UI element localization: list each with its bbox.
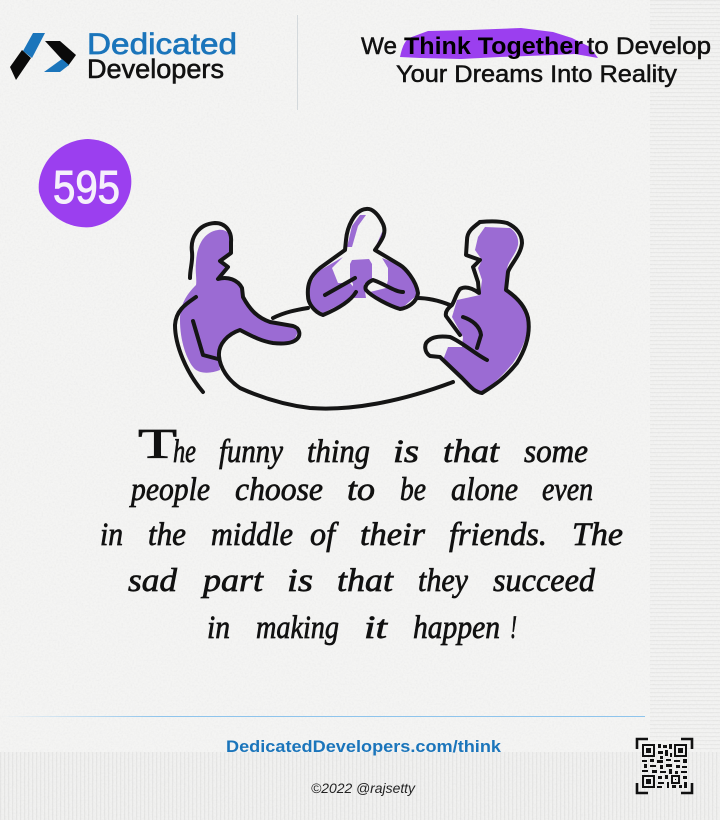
quote line 4: part — [201, 563, 264, 599]
quote line 4: succeed — [493, 563, 595, 599]
quote line 5: ! — [510, 610, 517, 646]
tagline line 1: to Develop — [587, 33, 711, 60]
purple brush highlight — [400, 28, 598, 59]
quote line 4: they — [418, 563, 468, 599]
quote line 4: is — [287, 563, 313, 599]
copyright: ©2022 @rajsetty — [311, 780, 416, 796]
quote line 3: friends. — [449, 517, 547, 553]
quote line 5: it — [364, 610, 388, 646]
logo wordmark: Developers — [87, 54, 224, 84]
badge: 595 — [39, 139, 131, 227]
quote line 3 — [100, 517, 623, 553]
quote line 3: of — [310, 517, 339, 553]
footer url: DedicatedDevelopers.com/think — [226, 737, 502, 756]
quote line 5: in — [207, 610, 230, 646]
tagline line 1 — [361, 33, 711, 60]
logo: Dedicated Developers — [10, 28, 237, 84]
illustration: three people around a table — [175, 209, 529, 409]
quote line 4: sad — [128, 563, 178, 599]
quote line 2 — [129, 472, 593, 508]
qr code — [637, 739, 692, 793]
tagline line 1: We — [361, 33, 397, 60]
quote line 1: thing — [307, 434, 370, 470]
person right — [425, 221, 529, 393]
qr corner brackets — [637, 739, 692, 793]
logo mark — [10, 33, 76, 80]
quote line 2: choose — [235, 472, 323, 508]
quote line 5: happen — [413, 610, 500, 646]
quote line 1: is — [393, 434, 419, 470]
quote line 3: The — [572, 517, 623, 553]
quote line 1: funny — [219, 434, 283, 470]
person middle — [308, 209, 418, 315]
quote line 1: T — [138, 422, 177, 468]
logo wordmark — [87, 28, 237, 84]
quote line 2: be — [400, 472, 426, 508]
quote line 1 — [138, 422, 588, 470]
quote line 4 — [128, 563, 595, 599]
quote line 1: that — [443, 434, 500, 470]
person left — [175, 223, 453, 409]
tagline line 2: Your Dreams Into Reality — [396, 61, 677, 88]
quote line 4: that — [337, 563, 394, 599]
quote line 3: in — [100, 517, 123, 553]
qr modules — [642, 744, 687, 788]
badge: 595: 595 — [53, 161, 120, 213]
logo wordmark: Dedicated — [87, 28, 237, 61]
quote line 5 — [207, 610, 517, 646]
quote line 2: to — [347, 472, 375, 508]
quote text — [100, 422, 623, 646]
quote line 2: people — [129, 472, 210, 508]
table back edge — [273, 298, 450, 318]
quote line 1: he — [173, 434, 196, 470]
quote line 3: their — [360, 517, 425, 553]
tagline line 1: Think Together — [404, 33, 583, 60]
tagline — [361, 28, 711, 88]
quote line 2: alone — [451, 472, 518, 508]
quote line 5: making — [256, 610, 339, 646]
quote line 2: even — [542, 472, 593, 508]
quote line 3: middle — [211, 517, 293, 553]
quote line 3: the — [148, 517, 186, 553]
quote line 1: some — [524, 434, 588, 470]
